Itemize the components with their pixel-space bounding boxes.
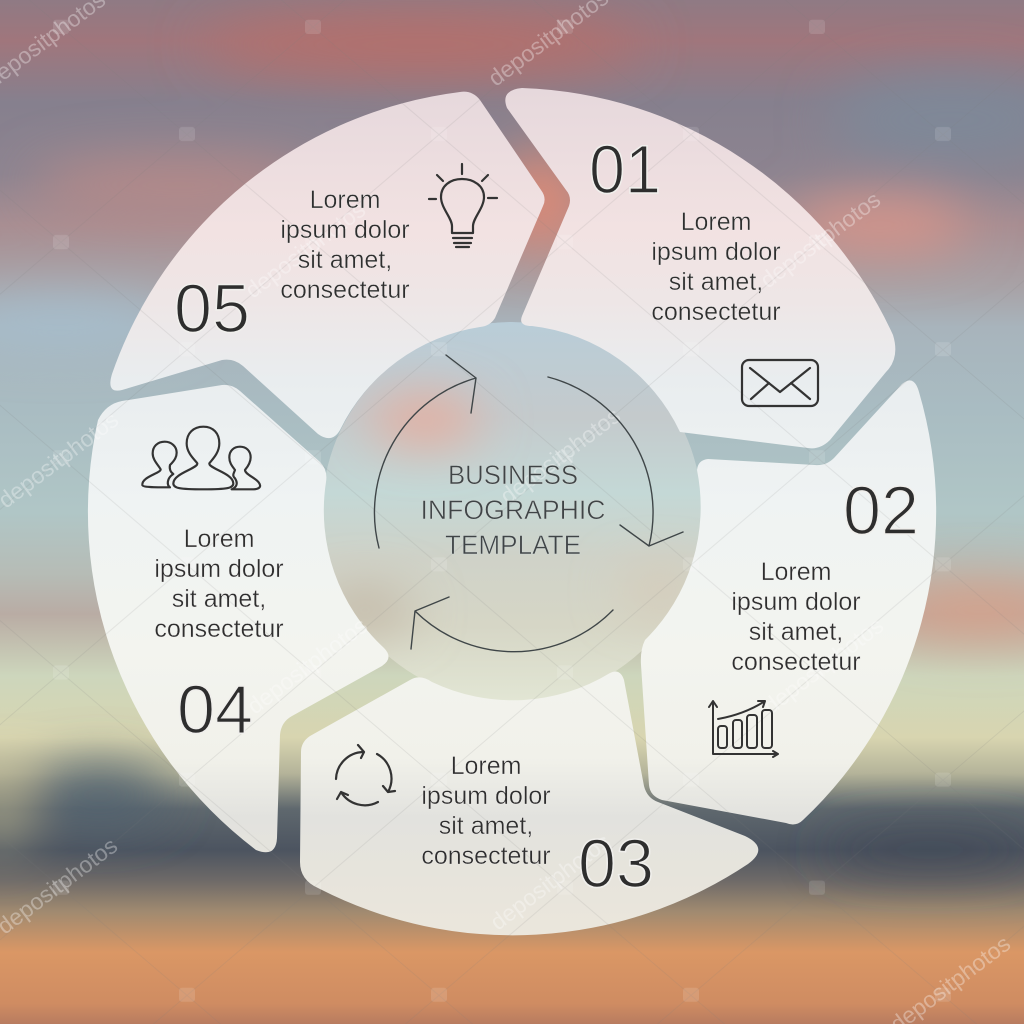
watermarks: depositphotos <box>485 828 615 935</box>
segment 05 text <box>280 186 410 304</box>
segment 05 text: consectetur <box>280 276 410 304</box>
segment 05 number: 05 <box>174 270 250 347</box>
panel: segment 04 <box>88 385 389 852</box>
segment 04 text: sit amet, <box>172 585 266 613</box>
icon: people group <box>142 427 260 489</box>
watermarks: depositphotos <box>240 196 370 303</box>
panel: segment 03 <box>300 672 758 935</box>
center circle <box>315 322 702 702</box>
segment 02 text <box>731 558 861 676</box>
segment 03 text: consectetur <box>421 842 551 870</box>
segment 04 text <box>154 525 284 643</box>
center title <box>420 460 606 560</box>
segment 01 text: sit amet, <box>669 268 763 296</box>
segment 04 text: Lorem <box>184 525 254 553</box>
center title: INFOGRAPHIC <box>420 495 606 525</box>
icon: envelope <box>742 360 818 406</box>
icon: light bulb <box>429 164 497 247</box>
watermarks: depositphotos <box>755 186 885 293</box>
segment 03 text <box>421 752 551 870</box>
segment 04 text: ipsum dolor <box>154 555 284 583</box>
segment 01 text: ipsum dolor <box>651 238 781 266</box>
segment 02 text: consectetur <box>731 648 861 676</box>
watermarks: depositphotos <box>242 612 372 719</box>
segment 05 text: Lorem <box>310 186 380 214</box>
segment 03 text: ipsum dolor <box>421 782 551 810</box>
segment panels <box>88 88 936 935</box>
segment 02 text: sit amet, <box>749 618 843 646</box>
center title: BUSINESS <box>448 460 578 490</box>
segment 01 text: Lorem <box>681 208 751 236</box>
segment 03 text: Lorem <box>451 752 521 780</box>
segment 01 number: 01 <box>589 131 661 208</box>
center cycle arrows <box>374 355 683 652</box>
segment 03 number: 03 <box>578 825 654 902</box>
segment 02 text: ipsum dolor <box>731 588 861 616</box>
panel: segment 05 <box>110 92 545 438</box>
icon: bar chart <box>709 701 778 757</box>
segment 04 text: consectetur <box>154 615 284 643</box>
watermarks: depositphotos <box>758 612 888 719</box>
watermarks: depositphotos <box>495 402 625 509</box>
segment 01 text: consectetur <box>651 298 781 326</box>
segment 03 text: sit amet, <box>439 812 533 840</box>
panel: segment 01 <box>505 88 895 448</box>
segment 02 text: Lorem <box>761 558 831 586</box>
segment 04 number: 04 <box>177 671 253 748</box>
segment 05 text: ipsum dolor <box>280 216 410 244</box>
center title: TEMPLATE <box>445 530 581 560</box>
icon: recycle arrows <box>336 745 395 805</box>
segment 05 text: sit amet, <box>298 246 392 274</box>
segment 01 text <box>651 208 781 326</box>
segment 02 number: 02 <box>843 472 919 549</box>
panel: segment 02 <box>641 380 936 824</box>
